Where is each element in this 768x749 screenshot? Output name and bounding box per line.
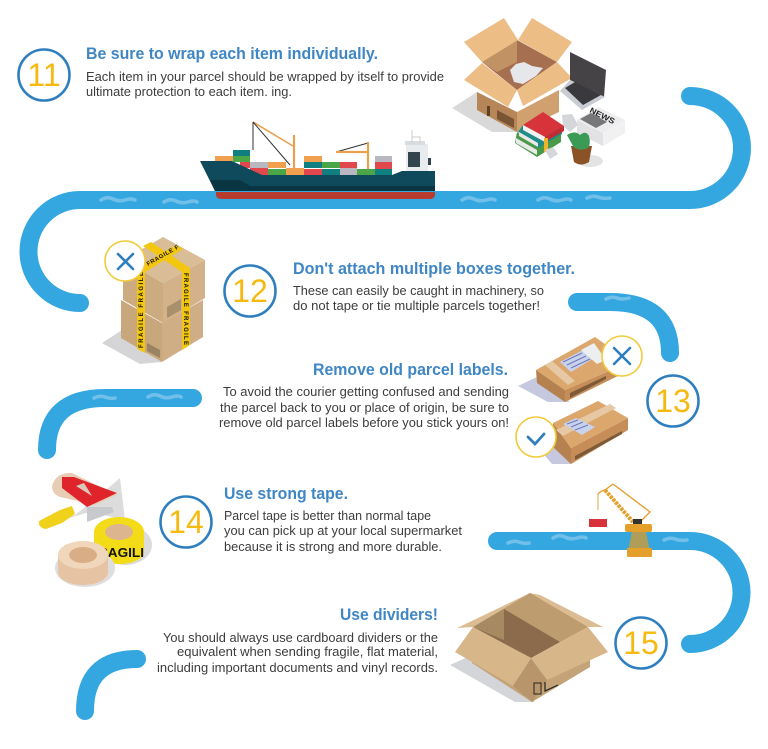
step 13 body text: the parcel back to you or place of origin, be sure to — [220, 400, 509, 415]
icon: check in circle, step 13 — [516, 417, 556, 457]
step 12 body text — [293, 283, 544, 313]
illustration: parcel with old labels — [518, 337, 630, 402]
step 12 heading: Don't attach multiple boxes together. — [293, 260, 575, 278]
step 14 body text: you can pick up at your local supermarket — [224, 523, 462, 538]
step 12 number badge — [224, 266, 276, 316]
step 11 body text: Each item in your parcel should be wrapped by itself to provide — [86, 69, 444, 84]
step 15 number badge: 15 — [623, 625, 659, 661]
illustration: container ship — [200, 122, 435, 199]
illustration: taped boxes: FRAGILE FRAGILE — [139, 272, 145, 348]
newspaper stack — [577, 106, 625, 146]
step 14 number badge: 14 — [168, 504, 204, 540]
step 11 heading: Be sure to wrap each item individually. — [86, 45, 378, 63]
step 13 number badge: 13 — [655, 383, 691, 419]
books — [515, 112, 564, 159]
step 14 body text — [224, 508, 462, 554]
step 12 number badge: 12 — [232, 273, 268, 309]
illustration: taped boxes: FRAGILE FRAGILE — [182, 273, 188, 345]
laptop — [560, 52, 606, 110]
step 15 number badge — [616, 618, 666, 668]
step 13 heading: Remove old parcel labels. — [313, 361, 508, 379]
road: bottom segment — [85, 659, 137, 711]
illustration: open box with divider — [450, 593, 608, 702]
step 11 number badge — [18, 50, 70, 100]
step 11 body text — [86, 69, 444, 99]
newspaper stack: NEWS — [588, 106, 617, 126]
icon: cross in circle, step 13 — [602, 336, 642, 376]
step 12 body text: do not tape or tie multiple parcels together! — [293, 298, 540, 313]
crumpled paper — [562, 114, 578, 132]
step 15 body text: including important documents and vinyl records. — [157, 660, 438, 675]
road: top route — [29, 96, 742, 303]
illustration: tape dispenser and rolls — [39, 473, 152, 587]
step 13 body text: To avoid the courier getting confused and sending — [223, 384, 509, 399]
step 14 heading: Use strong tape. — [224, 485, 348, 503]
road: segment by step 13 — [47, 395, 193, 450]
step 15 body text — [157, 630, 438, 675]
step 15 body text: equivalent when sending fragile, flat material, — [177, 644, 438, 659]
icon: cross in circle, step 12 — [105, 241, 145, 281]
step 13 number badge — [648, 376, 698, 426]
step 14 body text: because it is strong and more durable. — [224, 539, 442, 554]
step 15 heading: Use dividers! — [340, 606, 438, 624]
step 11 body text: ultimate protection to each item. ing. — [86, 84, 292, 99]
illustration: open box with items — [452, 18, 625, 167]
illustration: taped boxes: FRAGILE F — [146, 244, 180, 268]
step 15 body text: You should always use cardboard dividers or the — [163, 630, 438, 645]
road: segment by step 12 — [577, 297, 670, 353]
illustration: parcel with one label — [540, 401, 628, 464]
step 13 body text: remove old parcel labels before you stick yours on! — [219, 415, 509, 430]
illustration: dock crane — [589, 484, 652, 557]
potted cactus — [567, 132, 603, 167]
step 11 number badge: 11 — [27, 57, 61, 93]
illustration: tape dispenser and rolls: RAGILI — [98, 545, 144, 560]
step 14 number badge — [160, 496, 212, 548]
road: segment by step 14 — [497, 536, 742, 644]
step 13 body text — [219, 384, 509, 430]
illustration: taped boxes — [102, 237, 205, 364]
step 14 body text: Parcel tape is better than normal tape — [224, 508, 431, 523]
step 12 body text: These can easily be caught in machinery, so — [293, 283, 544, 298]
